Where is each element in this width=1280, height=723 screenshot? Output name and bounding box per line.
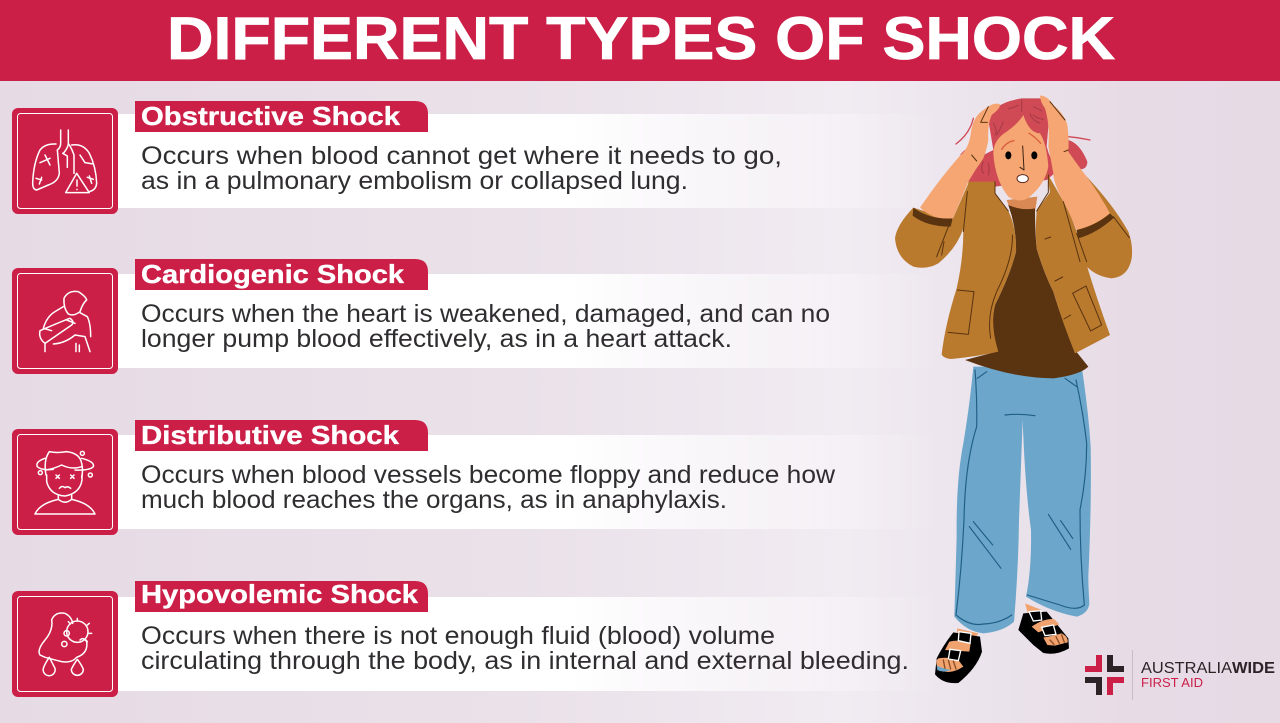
- description: as in a pulmonary embolism or collapsed lung.: [141, 167, 688, 195]
- description: much blood reaches the organs, as in anaphylaxis.: [141, 486, 727, 514]
- logo text: [1141, 660, 1275, 690]
- sandals: [935, 603, 1069, 683]
- title: DIFFERENT TYPES OF SHOCK: [167, 5, 1115, 72]
- heading tab: Cardiogenic Shock: [141, 259, 405, 289]
- logo: Australia Wide First Aid: [1085, 650, 1275, 700]
- jeans: [954, 367, 1091, 633]
- logo text: WIDE: [1232, 660, 1275, 677]
- heading tab: Hypovolemic Shock: [141, 579, 419, 609]
- heading tab: Obstructive Shock: [141, 101, 401, 131]
- panel: obstructive shock: [12, 101, 940, 214]
- description: [141, 300, 830, 353]
- illustration: distressed person: [895, 96, 1132, 683]
- icon: person clutching chest: [12, 268, 118, 374]
- description: circulating through the body, as in internal and external bleeding.: [141, 647, 909, 675]
- torso and head: [895, 96, 1132, 378]
- icon: lungs with warning: [12, 108, 118, 214]
- logo text: FIRST AID: [1141, 675, 1203, 690]
- logo text: AUSTRALIA: [1141, 660, 1232, 677]
- icon: bleeding organ: [12, 591, 118, 697]
- description: Occurs when blood cannot get where it needs to go,: [141, 142, 782, 170]
- heading tab: Distributive Shock: [141, 420, 400, 450]
- description: [141, 461, 836, 514]
- description: Occurs when there is not enough fluid (blood) volume: [141, 622, 775, 650]
- icon: logo cross: [1085, 655, 1124, 695]
- description: Occurs when the heart is weakened, damaged, and can no: [141, 300, 830, 328]
- description: [141, 622, 909, 675]
- header banner: [0, 0, 1280, 81]
- description: Occurs when blood vessels become floppy and reduce how: [141, 461, 836, 489]
- icon: dizzy person: [12, 429, 118, 535]
- description: [141, 142, 782, 195]
- panel: cardiogenic shock: [12, 259, 940, 374]
- panel: hypovolemic shock: [12, 579, 940, 697]
- description: longer pump blood effectively, as in a heart attack.: [141, 325, 732, 353]
- panel: distributive shock: [12, 420, 940, 535]
